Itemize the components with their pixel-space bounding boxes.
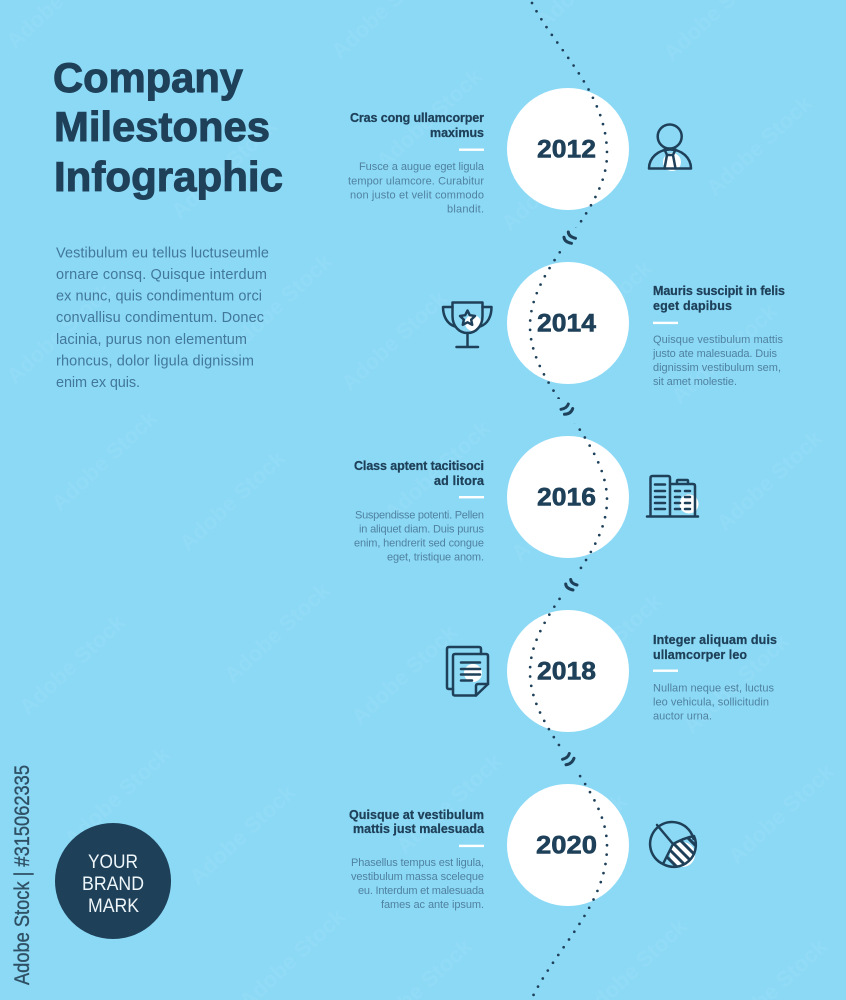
text block: 2014: Mauris suscipit in felis — [653, 284, 785, 298]
intro paragraph: rhoncus, dolor ligula dignissim — [56, 353, 254, 369]
title: Company — [53, 54, 244, 101]
text block: 2012: maximus — [430, 126, 484, 140]
text: Adobe Stock — [46, 405, 162, 516]
text block: 2016 — [354, 459, 485, 564]
year labels: 2020 — [536, 832, 597, 860]
intro paragraph: ornare consq. Quisque interdum — [56, 267, 267, 283]
text block: 2014: eget dapibus — [653, 299, 732, 313]
text block: 2016: eget, tristique anom. — [387, 552, 484, 564]
text block: 2018: auctor urna. — [653, 710, 712, 722]
text: Adobe Stock — [174, 445, 290, 556]
text: Adobe Stock — [371, 63, 487, 174]
intro paragraph: Vestibulum eu tellus luctuseumle — [56, 246, 269, 262]
text: Adobe Stock — [379, 415, 495, 526]
text: Adobe Stock — [1, 278, 117, 389]
text: Adobe Stock — [541, 255, 657, 366]
text block: 2012: non justo et velit commodo — [350, 189, 484, 201]
icon: trophy — [443, 302, 492, 347]
brand mark: YOUR — [88, 851, 138, 873]
intro paragraph: enim ex quis. — [56, 375, 140, 391]
intro paragraph: lacinia, purus non elementum — [56, 332, 247, 348]
brand mark: BRAND — [82, 873, 144, 895]
text block: 2018 — [653, 633, 777, 722]
intro paragraph: ex nunc, quis condimentum orci — [56, 289, 262, 305]
text block: 2016: ad litora — [434, 474, 485, 488]
text: Adobe Stock — [346, 619, 462, 730]
year labels: 2016 — [537, 484, 596, 512]
text: Adobe Stock — [551, 588, 667, 699]
text block: 2014: dignissim vestibulum sem, — [653, 362, 781, 374]
title: Infographic — [54, 153, 283, 200]
stock side label: Adobe Stock | #315062335 — [11, 765, 34, 985]
intro paragraph: convallisu condimentum. Donec — [56, 310, 264, 326]
text block: 2012: Fusce a augue eget ligula — [359, 161, 485, 173]
text block: 2018: Integer aliquam duis — [653, 633, 777, 647]
text block: 2020: Phasellus tempus est ligula, — [351, 857, 484, 869]
text block: 2014: justo ate malesuada. Duis — [652, 348, 778, 360]
text block: 2016: in aliquet diam. Duis purus — [359, 524, 484, 536]
year labels: 2014 — [537, 310, 596, 338]
text: Adobe Stock — [506, 455, 622, 566]
text: Adobe Stock — [516, 788, 632, 899]
text: Adobe Stock — [336, 285, 452, 396]
icon: pie chart — [650, 822, 703, 869]
text block: 2014: sit amet molestie. — [653, 376, 737, 388]
text block: 2016: enim, hendrerit sed congue — [354, 538, 484, 550]
brand mark — [55, 823, 171, 939]
icon: office buildings — [647, 476, 698, 516]
text: Adobe Stock — [59, 741, 175, 852]
milestone circles — [507, 88, 629, 906]
text: Adobe Stock — [184, 779, 300, 890]
text: Adobe Stock — [219, 577, 335, 688]
text block: 2012 — [348, 111, 485, 216]
text block: 2018: ullamcorper leo — [653, 648, 747, 662]
text block: 2018: Nullam neque est, luctus — [653, 682, 774, 694]
text: Adobe Stock — [701, 90, 817, 201]
text block: 2012: tempor ulamcore. Curabitur — [348, 175, 484, 187]
dotted timeline — [530, 3, 607, 998]
text: Adobe Stock — [391, 748, 507, 859]
year labels — [536, 136, 597, 860]
text block: 2020 — [349, 808, 485, 911]
icon: businessman — [649, 124, 691, 171]
text block: 2020: eu. Interdum et malesuada — [358, 885, 485, 897]
text: Adobe Stock — [723, 758, 839, 869]
text: Adobe Stock — [666, 298, 782, 409]
text block: 2020: fames ac ante ipsum. — [381, 899, 484, 911]
title: Milestones — [54, 103, 270, 150]
text block: 2020: vestibulum massa sceleque — [351, 871, 484, 883]
text block: 2012: blandit. — [447, 204, 484, 216]
text: Adobe Stock — [14, 609, 130, 720]
text: Adobe Stock — [711, 425, 827, 536]
icon: documents — [447, 647, 488, 696]
text block: 2020: mattis just malesuada — [353, 822, 485, 836]
year labels: 2018 — [537, 658, 596, 686]
intro paragraph — [56, 246, 269, 391]
chevrons between milestones — [553, 228, 583, 772]
text: Adobe Stock — [678, 628, 794, 739]
brand mark: MARK — [88, 895, 139, 917]
text block: 2014 — [652, 284, 785, 388]
text: Adobe Stock — [496, 125, 612, 236]
year labels: 2012 — [537, 136, 596, 164]
text block: 2020: Quisque at vestibulum — [349, 808, 484, 822]
text block: 2014: Quisque vestibulum mattis — [653, 334, 784, 346]
text: Adobe Stock — [166, 113, 282, 224]
title — [53, 54, 283, 200]
text block: 2012: Cras cong ullamcorper — [350, 111, 484, 125]
text block: 2016: Suspendisse potenti. Pellen — [355, 510, 484, 522]
text block: 2018: leo vehicula, sollicitudin — [653, 696, 769, 708]
text block: 2016: Class aptent tacitisoci — [354, 459, 484, 473]
text: Adobe Stock — [221, 248, 337, 359]
